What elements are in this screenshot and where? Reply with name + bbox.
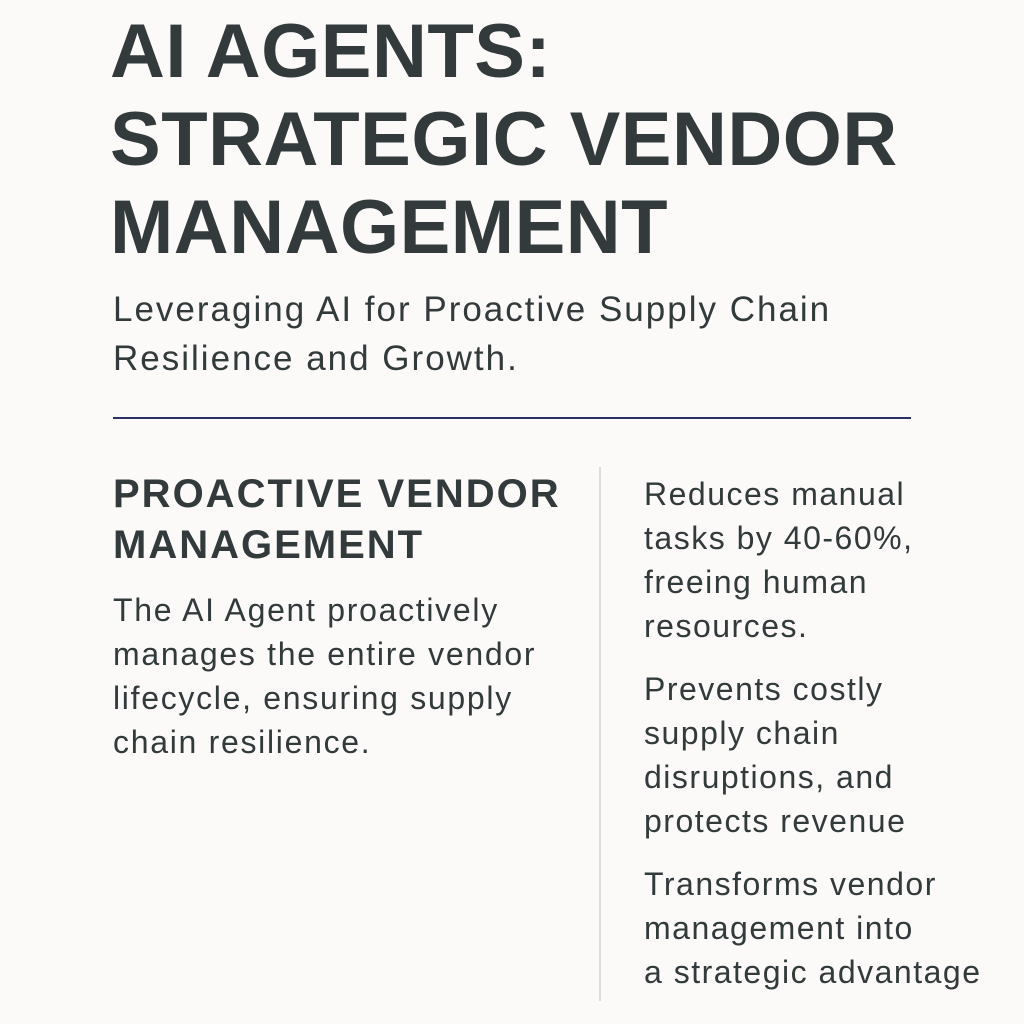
title: AI AGENTS:	[110, 9, 551, 94]
title: MANAGEMENT	[110, 185, 668, 270]
subtitle: Resilience and Growth.	[113, 339, 519, 378]
title	[110, 9, 898, 270]
subtitle	[113, 290, 831, 378]
benefit: manual tasks: freeing human	[644, 564, 868, 600]
body text: The AI Agent proactively	[113, 592, 499, 628]
benefit: manual tasks: resources.	[644, 608, 808, 644]
benefit: strategic: a strategic advantage	[644, 954, 981, 990]
body text: manages the entire vendor	[113, 636, 536, 672]
benefit: manual tasks	[644, 476, 913, 644]
panel: benefits	[644, 476, 981, 990]
subtitle: Leveraging AI for Proactive Supply Chain	[113, 290, 831, 329]
section heading: MANAGEMENT	[113, 523, 424, 567]
title: STRATEGIC VENDOR	[110, 97, 898, 182]
section heading: PROACTIVE VENDOR	[113, 472, 561, 516]
benefit: strategic: Transforms vendor	[644, 866, 937, 902]
body text: lifecycle, ensuring supply	[113, 680, 513, 716]
benefit: disruptions: disruptions, and	[644, 759, 894, 795]
benefit: disruptions: Prevents costly	[644, 671, 883, 707]
benefit: strategic	[644, 866, 981, 990]
benefit: manual tasks: tasks by 40-60%,	[644, 520, 913, 556]
benefit: manual tasks: Reduces manual	[644, 476, 905, 512]
benefit: disruptions: protects revenue	[644, 803, 906, 839]
body text: chain resilience.	[113, 724, 371, 760]
benefit: strategic: management into	[644, 910, 914, 946]
benefit: disruptions	[644, 671, 906, 839]
body text	[113, 592, 536, 760]
benefit: disruptions: supply chain	[644, 715, 840, 751]
section heading	[113, 472, 561, 567]
